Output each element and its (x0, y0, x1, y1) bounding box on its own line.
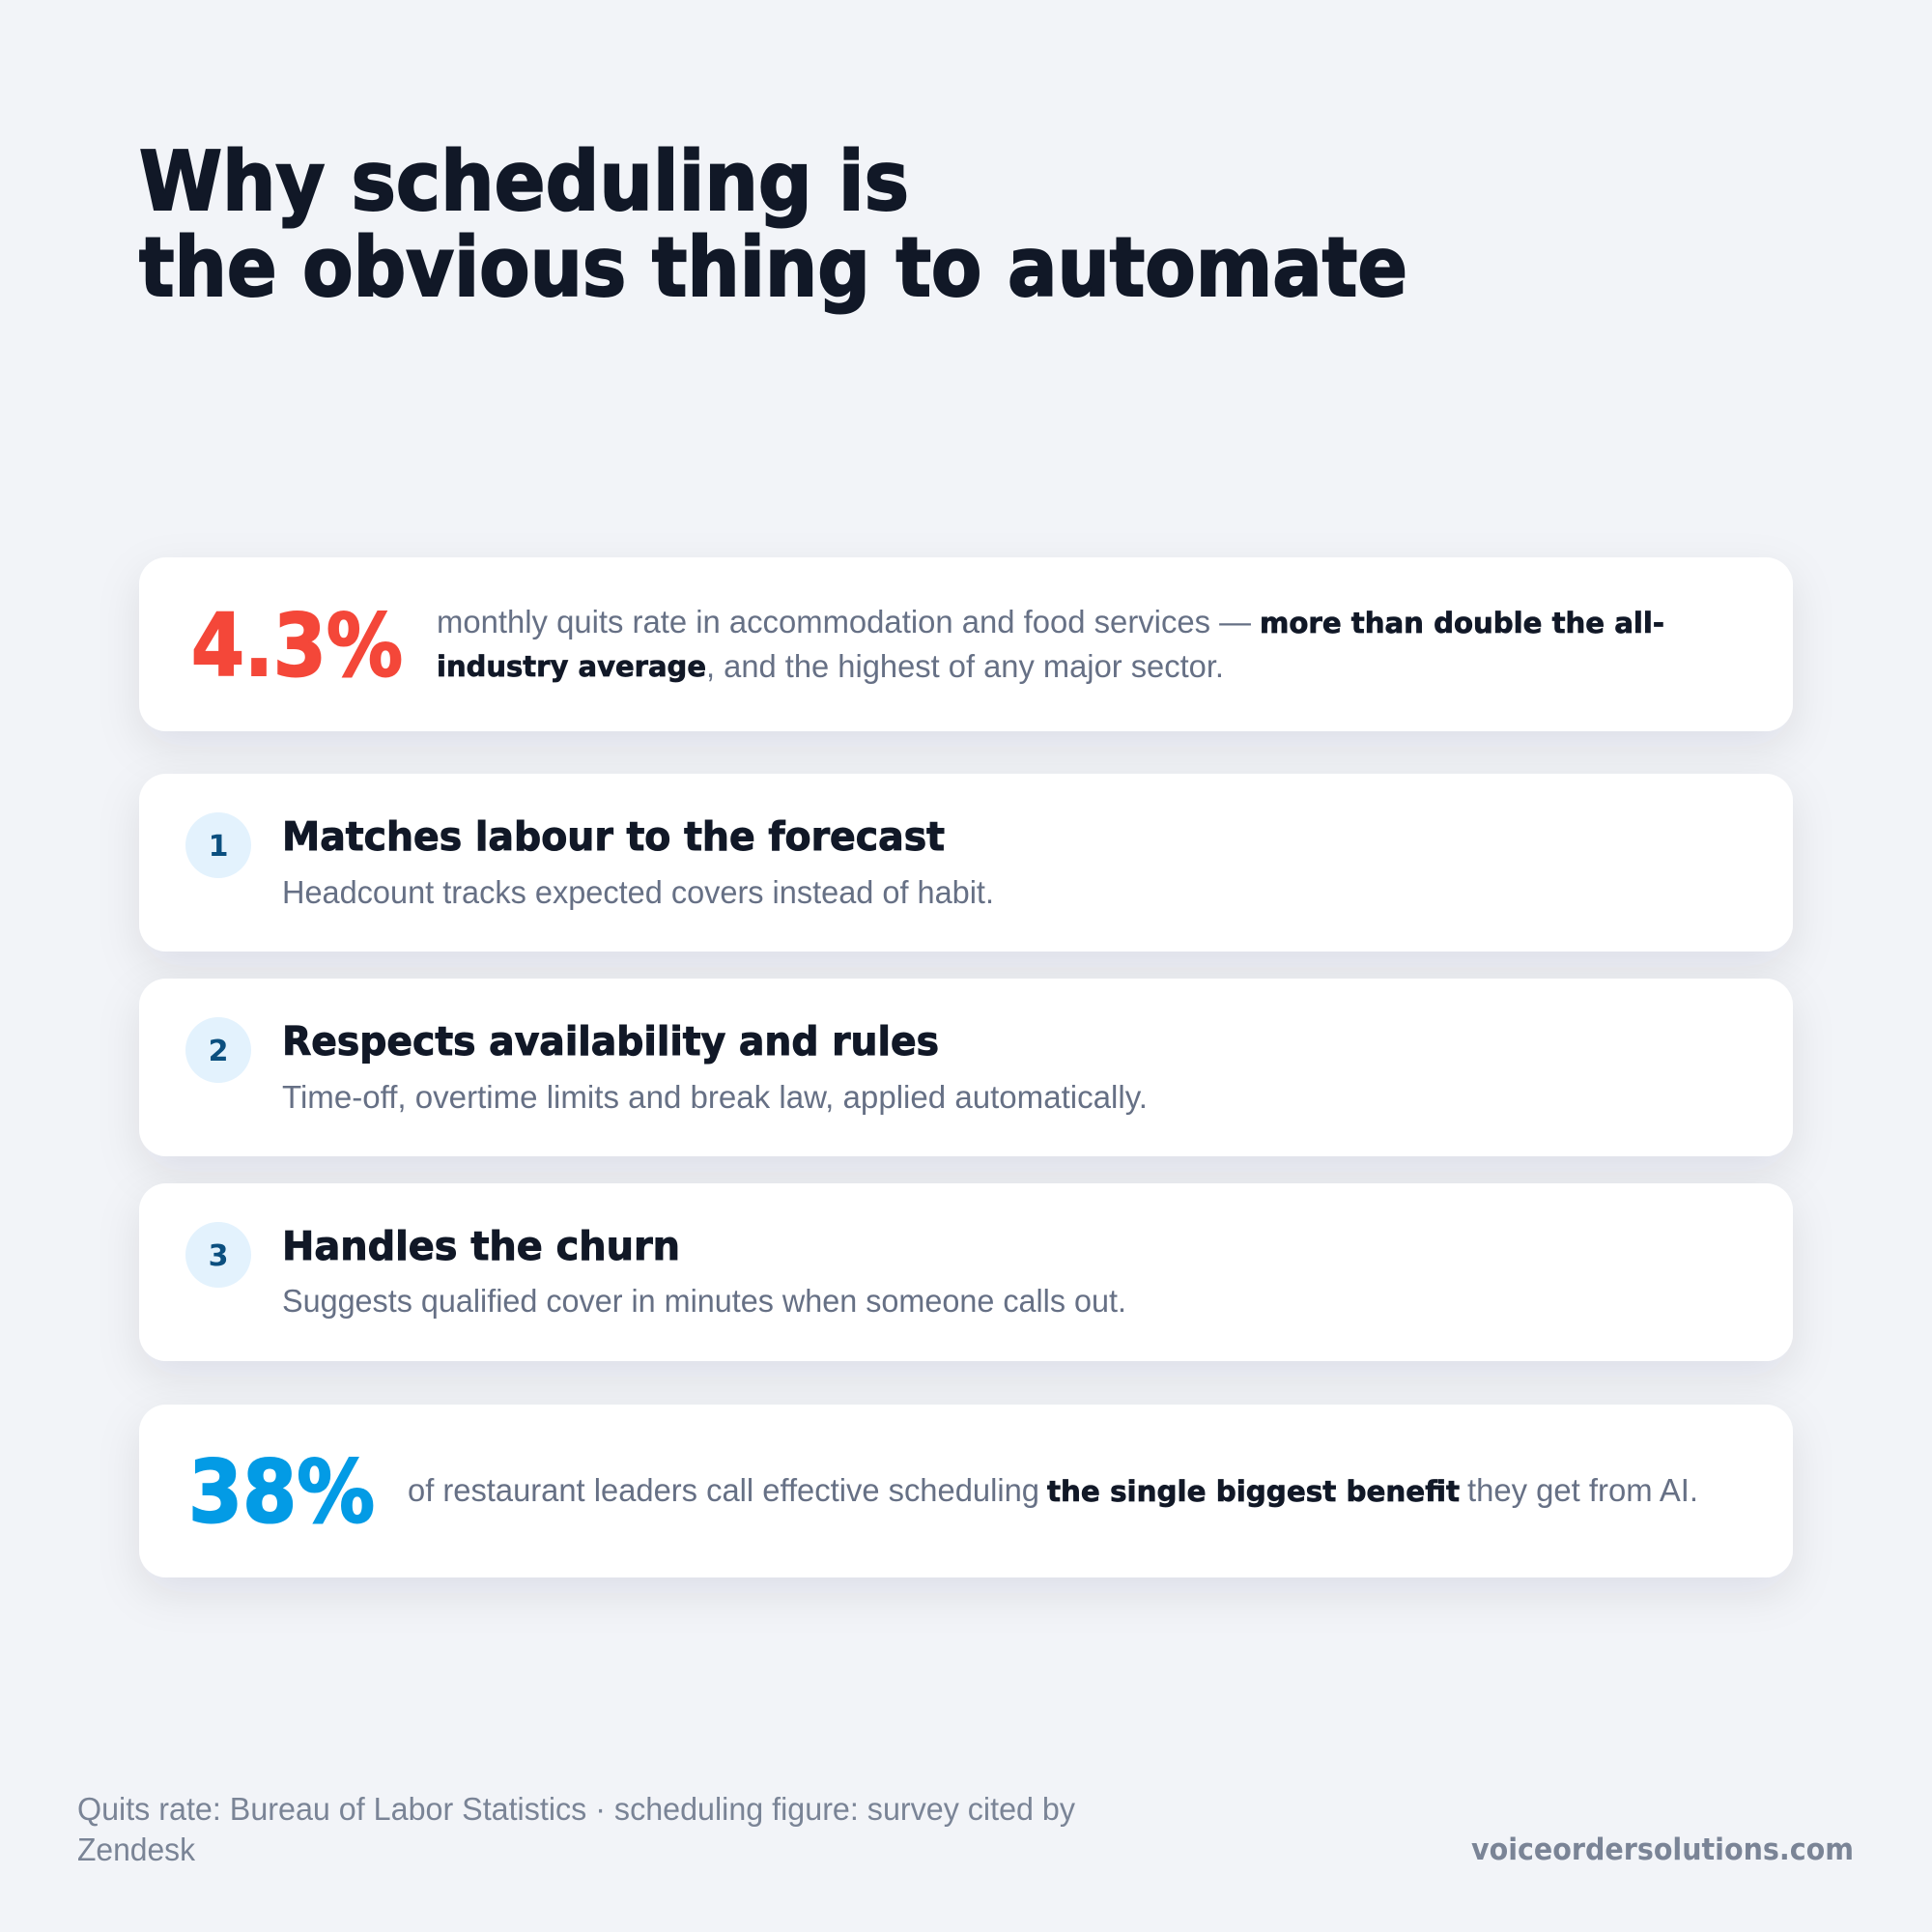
stat: 38%: 38% (188, 1441, 375, 1542)
benefit description (408, 1472, 1698, 1508)
panel: step 2 (139, 979, 1793, 1156)
step 1 heading: Matches labour to the forecast (282, 813, 945, 860)
step 2 heading: Respects availability and rules (282, 1018, 939, 1065)
benefit description: of restaurant leaders call effective scheduling (408, 1472, 1039, 1508)
icon: number 1 badge (185, 812, 251, 878)
panel: scheduling benefit stat (139, 1405, 1793, 1577)
icon: number 3 badge: 3 (209, 1239, 228, 1273)
source note: Quits rate: Bureau of Labor Statistics · scheduling figure: survey cited by (77, 1791, 1075, 1827)
brand url: voiceordersolutions.com (1471, 1833, 1854, 1867)
quits rate description: , and the highest of any major sector. (706, 648, 1224, 684)
icon: number 2 badge (185, 1017, 251, 1083)
step 2 description: Time-off, overtime limits and break law, applied automatically. (282, 1079, 1148, 1115)
icon: number 2 badge: 2 (209, 1035, 228, 1068)
icon: number 1 badge: 1 (209, 830, 228, 864)
stat: 4.3%: 4.3% (191, 595, 403, 696)
benefit description: they get from AI. (1467, 1472, 1698, 1508)
step 3 heading: Handles the churn (282, 1223, 680, 1269)
panel: quits rate stat (139, 557, 1793, 731)
title (139, 134, 1407, 316)
icon: number 3 badge (185, 1222, 251, 1288)
title: Why scheduling is (139, 134, 909, 230)
step 3 description: Suggests qualified cover in minutes when someone calls out. (282, 1283, 1126, 1319)
panel: step 1 (139, 774, 1793, 952)
source note (77, 1791, 1075, 1867)
title: the obvious thing to automate (139, 220, 1407, 316)
quits rate description: more than double the all- (1260, 607, 1664, 639)
quits rate description (437, 604, 1664, 684)
quits rate description: industry average (437, 650, 706, 683)
quits rate description: monthly quits rate in accommodation and food services — (437, 604, 1251, 639)
source note: Zendesk (77, 1832, 195, 1867)
benefit description: the single biggest benefit (1047, 1475, 1460, 1508)
step 1 description: Headcount tracks expected covers instead of habit. (282, 874, 994, 910)
panel: step 3 (139, 1183, 1793, 1361)
